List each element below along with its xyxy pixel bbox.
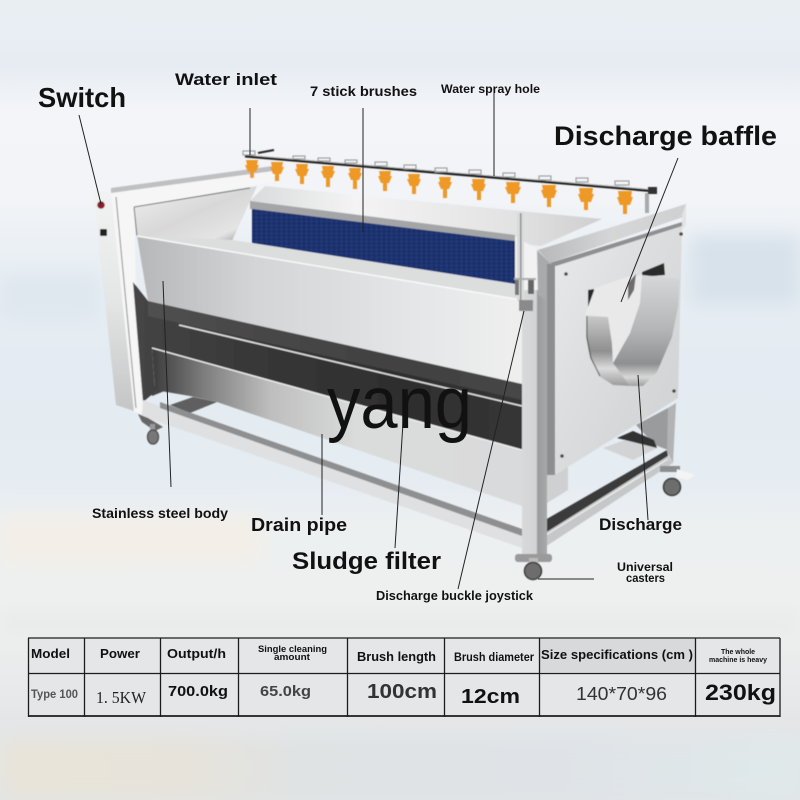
lower panel (152, 348, 522, 506)
right end panel (538, 204, 686, 263)
icon: front caster (515, 554, 552, 580)
label: stick brushes: 7 stick brushes (310, 83, 417, 99)
table header row: Model (31, 646, 70, 661)
rear trough wall (250, 186, 602, 246)
icon: left caster (138, 414, 163, 444)
table header row: machine is heavy (709, 655, 768, 664)
chute window (588, 263, 665, 307)
table data row: 1. 5KW (96, 688, 147, 707)
rear right opening (603, 408, 668, 460)
table header row: Brush diameter (454, 652, 534, 664)
bottom frame bar (142, 400, 522, 548)
right corner white wedge (515, 236, 538, 305)
label: sludge filter: Sludge filter (292, 548, 441, 575)
drain box (547, 466, 568, 503)
label: water inlet: Water inlet (175, 70, 277, 89)
leader lines (79, 92, 678, 589)
table header row: amount (274, 652, 311, 663)
fasteners (560, 232, 683, 458)
table data row: 230kg (705, 680, 776, 705)
label: discharge buckle joystick: Discharge buckle joystick (376, 589, 533, 603)
rear right leg (667, 403, 676, 463)
label: universal casters: Universal (617, 562, 673, 574)
table header row: The whole (721, 647, 755, 656)
table header row: Single cleaning (258, 644, 327, 655)
side frame bars (545, 450, 668, 533)
label: water spray hole: Water spray hole (441, 84, 540, 96)
specification table (28, 638, 780, 717)
joystick handle (514, 213, 536, 311)
label: universal casters: casters (626, 573, 665, 585)
brush belt (252, 209, 515, 284)
table data row (31, 680, 776, 708)
watermark: yang (327, 363, 472, 444)
icon: black button (100, 229, 107, 236)
icon: rear caster (660, 466, 695, 496)
table header row: Power (100, 646, 140, 661)
left end panel (93, 166, 273, 414)
icon: red switch (97, 201, 105, 209)
label: drain pipe: Drain pipe (251, 515, 347, 535)
label: discharge baffle: Discharge baffle (554, 121, 777, 151)
spray bar (243, 150, 657, 213)
table header row: Output/h (167, 646, 226, 661)
table data row: 140*70*96 (576, 684, 667, 704)
table data row: 12cm (461, 686, 520, 708)
orange nozzles (245, 160, 633, 214)
table data row: Type 100 (31, 689, 78, 701)
table data row: 100cm (367, 681, 437, 703)
machine (93, 150, 695, 580)
front hopper rim (137, 236, 540, 303)
table header row (31, 644, 768, 664)
table header row: Size specifications (cm ) (541, 647, 693, 662)
label: stainless steel body: Stainless steel body (92, 505, 228, 521)
label: universal casters (617, 562, 673, 585)
table data row: 700.0kg (168, 684, 228, 700)
table header row: Brush length (357, 649, 436, 664)
discharge chute (585, 274, 680, 386)
dark recess (133, 282, 522, 450)
front leg (522, 290, 547, 562)
label: discharge: Discharge (599, 516, 682, 534)
table data row: 65.0kg (260, 684, 311, 700)
front hopper panel (137, 236, 537, 388)
label: switch: Switch (38, 82, 126, 113)
rear frame bars (150, 380, 217, 413)
